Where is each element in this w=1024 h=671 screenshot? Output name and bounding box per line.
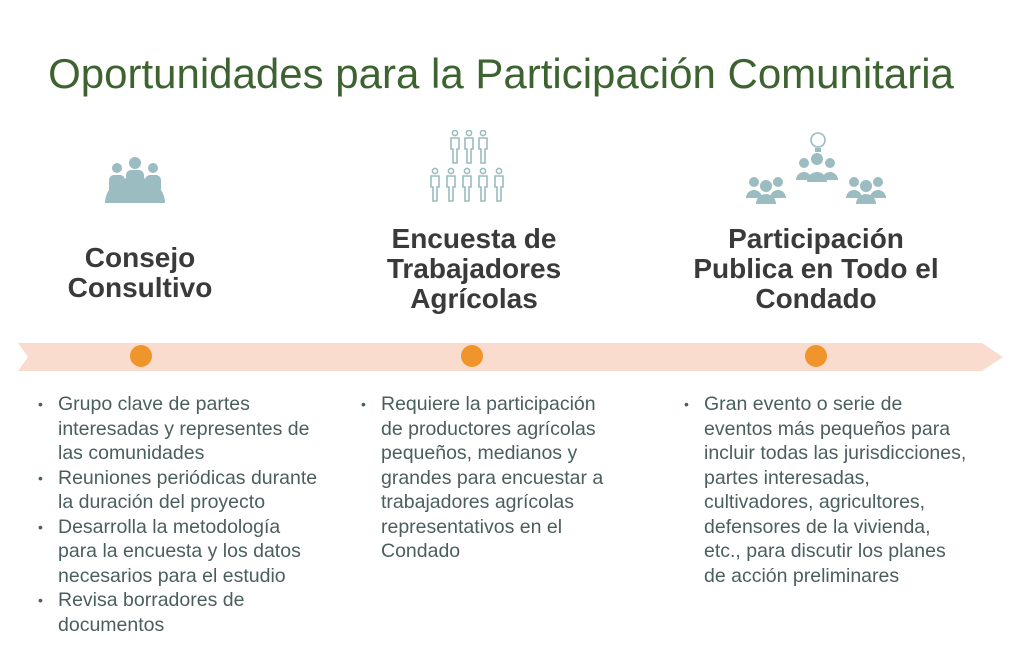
heading: Encuesta: Encuesta de — [392, 223, 556, 254]
list: encuesta: representativos en el — [381, 516, 562, 538]
list: encuesta: Condado — [381, 540, 460, 562]
list: consejo: las comunidades — [58, 442, 204, 464]
heading: Consejo Consultivo: Consejo — [85, 242, 195, 273]
list: encuesta: pequeños, medianos y — [381, 442, 577, 464]
title: Oportunidades para la Participación Comunitaria — [48, 50, 954, 97]
list: consejo — [38, 393, 317, 636]
heading: Participación: Publica en Todo el — [693, 253, 939, 284]
list: encuesta — [362, 393, 604, 562]
icon: council — [105, 157, 165, 203]
list: encuesta: Requiere la participación — [381, 393, 596, 415]
heading: Participación: Condado — [755, 283, 877, 314]
list: consejo: necesarios para el estudio — [58, 564, 286, 586]
list: participacion: cultivadores, agricultores, — [704, 491, 925, 513]
dot 1 — [130, 345, 152, 367]
heading: Consejo Consultivo — [68, 242, 212, 303]
list: consejo: para la encuesta y los datos — [58, 540, 301, 562]
list: consejo: interesadas y representes de — [58, 418, 309, 440]
heading: Participación — [693, 223, 939, 314]
list: participacion: incluir todas las jurisdicciones, — [704, 442, 966, 464]
list: participacion: de acción preliminares — [704, 564, 899, 586]
list: participacion — [684, 393, 966, 586]
heading: Participación: Participación — [728, 223, 904, 254]
heading: Encuesta: Trabajadores — [387, 253, 561, 284]
heading: Consejo Consultivo: Consultivo — [68, 272, 212, 303]
list: participacion: etc., para discutir los planes — [704, 540, 946, 562]
list: consejo: la duración del proyecto — [58, 491, 265, 513]
list: encuesta: de productores agrícolas — [381, 418, 596, 440]
list: consejo: Grupo clave de partes — [58, 393, 250, 415]
heading: Encuesta — [387, 223, 561, 314]
list: consejo: documentos — [58, 614, 164, 636]
list: participacion: eventos más pequeños para — [704, 418, 950, 440]
list: encuesta: grandes para encuestar a — [381, 466, 603, 488]
dot 2 — [461, 345, 483, 367]
dot 3 — [805, 345, 827, 367]
list: participacion: Gran evento o serie de — [704, 393, 902, 415]
icon: workers — [430, 130, 504, 202]
list: participacion: defensores de la vivienda, — [704, 516, 931, 538]
icon: public participation — [746, 132, 886, 204]
list: consejo: Revisa borradores de — [58, 589, 244, 611]
timeline arrow — [18, 343, 1003, 371]
list: consejo: Reuniones periódicas durante — [58, 466, 317, 488]
list: participacion: partes interesadas, — [704, 466, 870, 488]
list: encuesta: trabajadores agrícolas — [381, 491, 574, 513]
heading: Encuesta: Agrícolas — [410, 283, 538, 314]
list: consejo: Desarrolla la metodología — [58, 516, 280, 538]
